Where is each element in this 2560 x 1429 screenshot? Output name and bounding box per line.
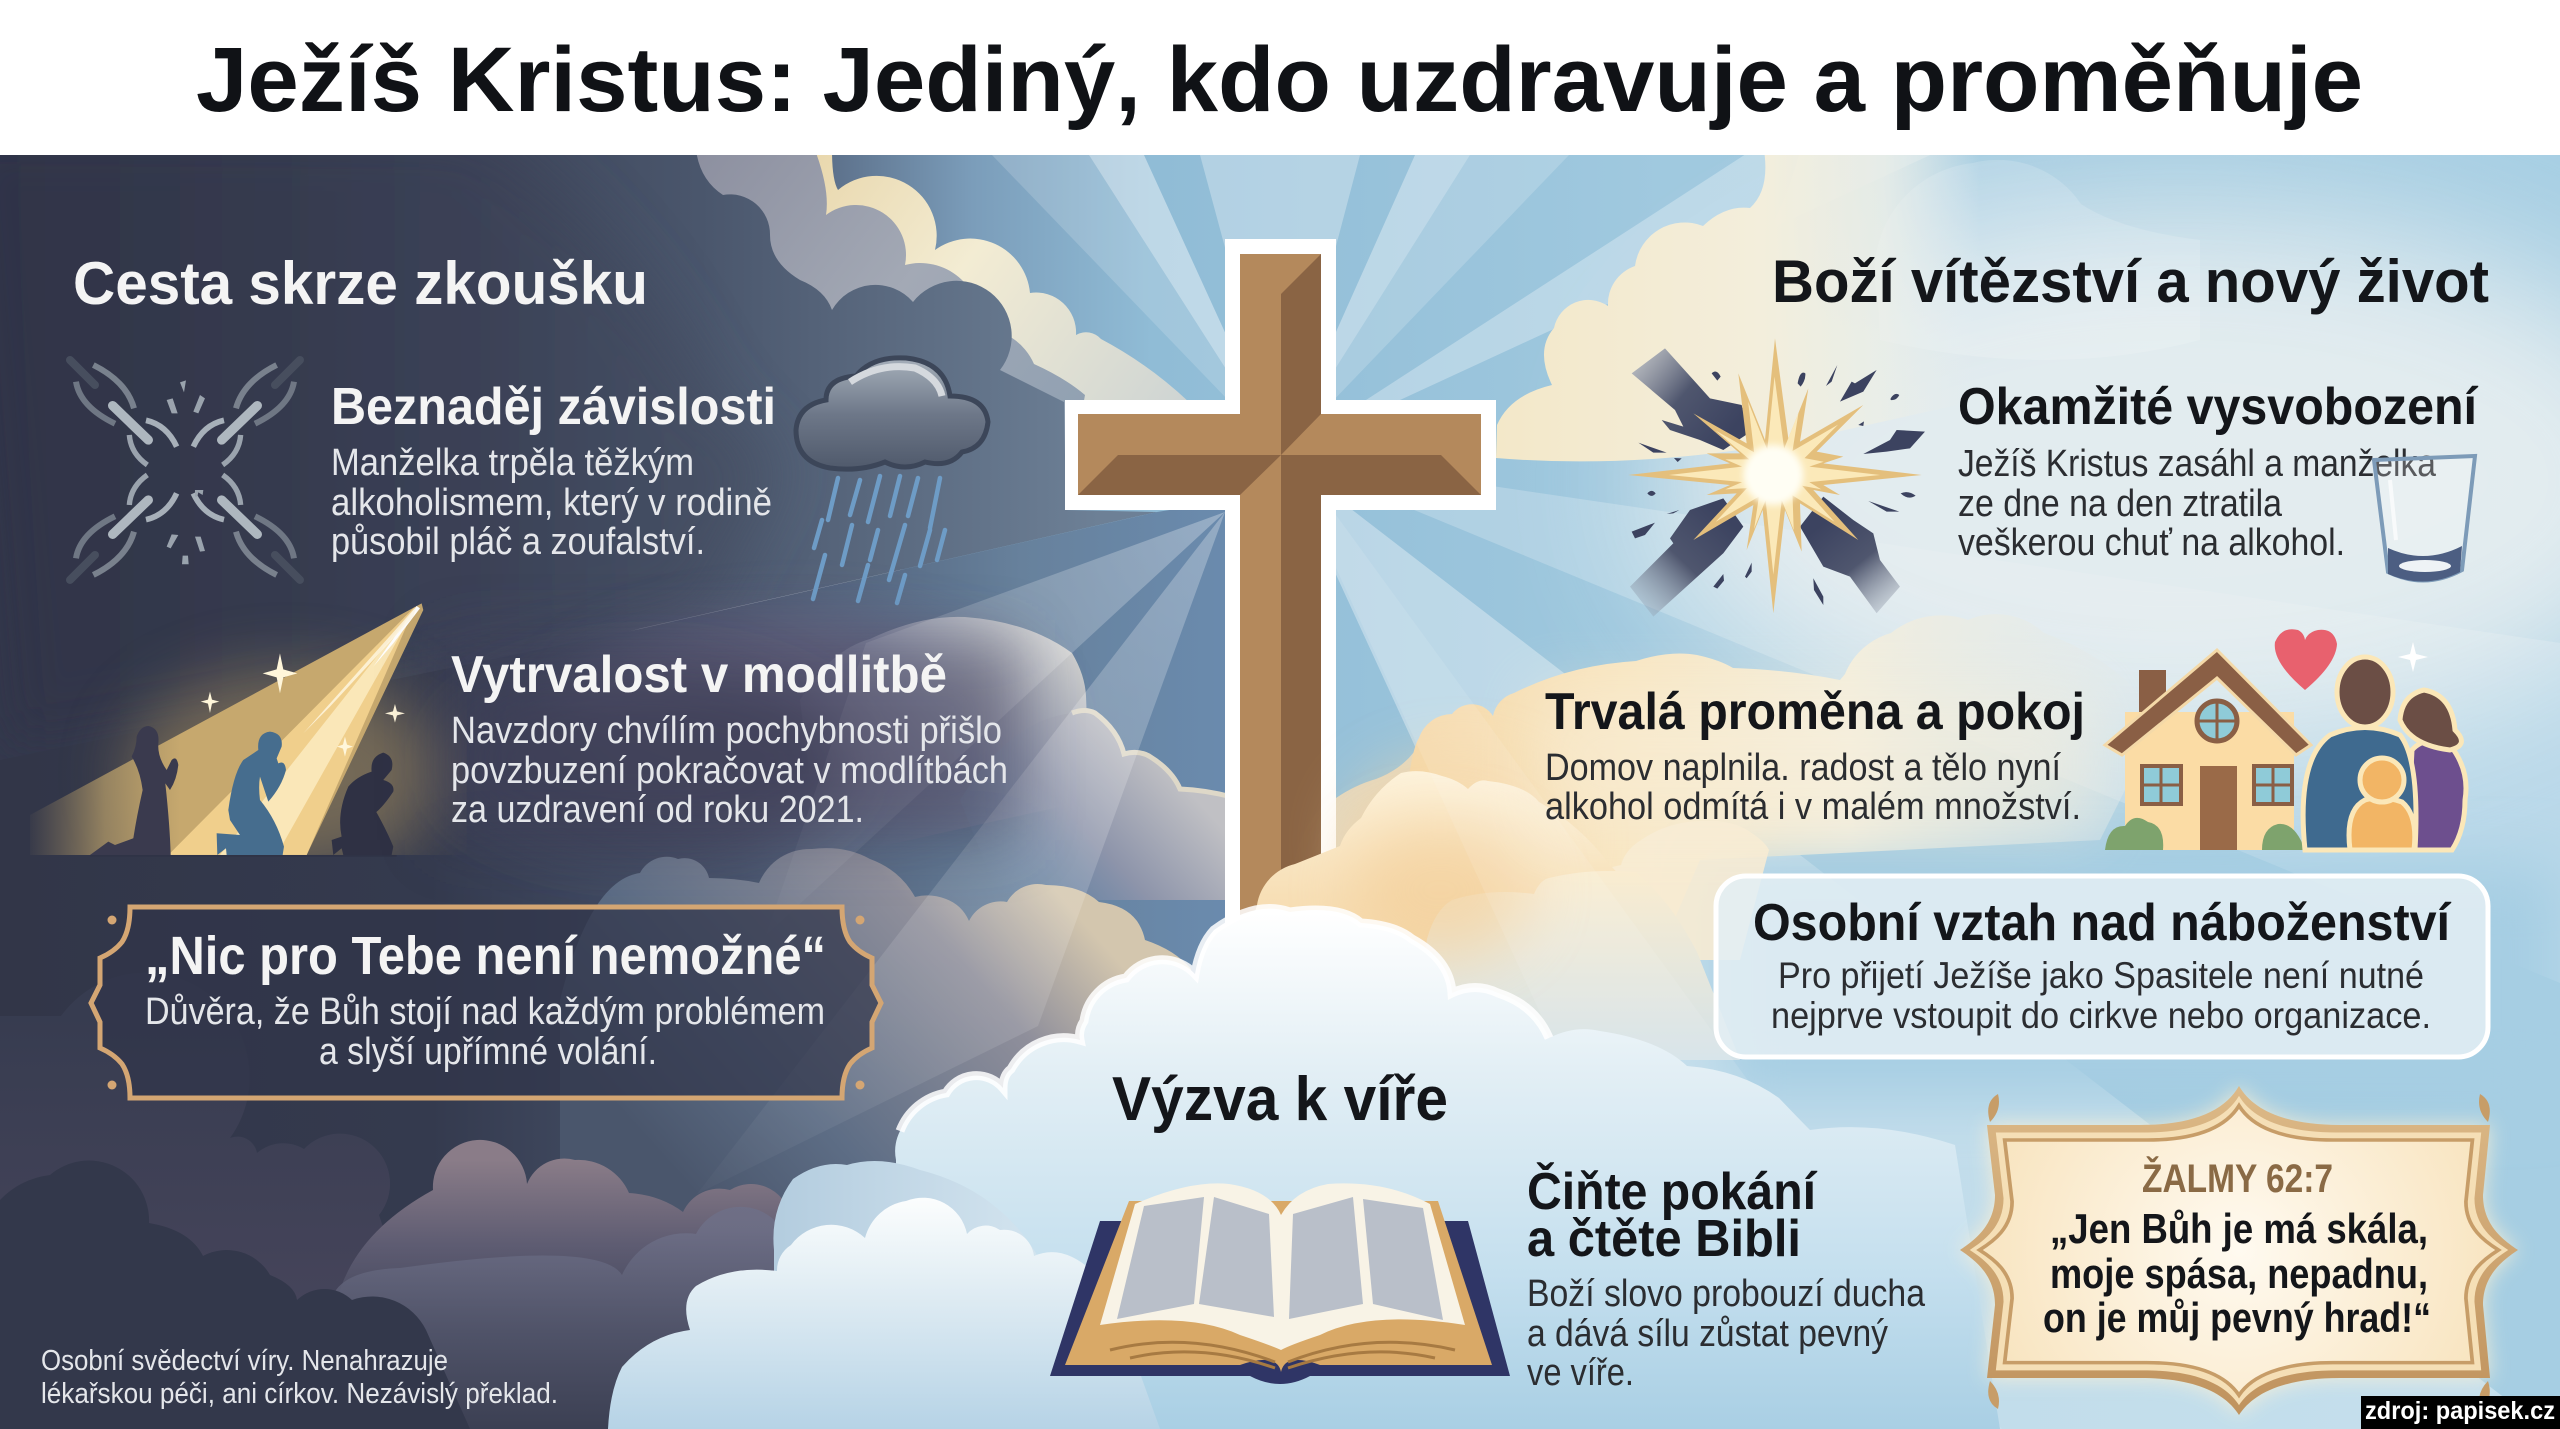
- title: Ježíš Kristus: Jediný, kdo uzdravuje a proměňuje: [196, 29, 2363, 131]
- icon: empty glass: [2374, 456, 2475, 582]
- sparkle: [2398, 642, 2428, 672]
- text block: lasting change: Trvalá proměna a pokoj: [1545, 683, 2085, 741]
- rays across the dark side: [768, 512, 1225, 1135]
- icon: open bible: [1050, 1183, 1510, 1384]
- heart: [2275, 629, 2337, 690]
- callout: personal relationship box: Pro přijetí Ježíše jako Spasitele není nutné: [1778, 955, 2424, 996]
- cross: [1065, 239, 1496, 960]
- text block: repent and read: [1527, 1162, 1926, 1394]
- lavender cloud: [829, 616, 1086, 828]
- grey cloud above the quote: [560, 848, 1191, 1196]
- bright clouds top right: [1496, 150, 2560, 750]
- text block: deliverance: Ježíš Kristus zasáhl a manželka: [1958, 443, 2437, 485]
- callout: quote frame: a slyší upřímné volání.: [319, 1031, 657, 1073]
- disclaimer text: lékařskou péči, ani církov. Nezávislý překlad.: [41, 1378, 558, 1410]
- family: [2303, 657, 2466, 850]
- text block: addiction: [331, 378, 776, 563]
- text block: prayer: Navzdory chvílím pochybnosti přišlo: [451, 710, 1002, 752]
- callout: quote frame: [91, 907, 881, 1098]
- text block: repent and read: Čiňte pokání: [1527, 1162, 1817, 1221]
- figure: bowing man: [332, 753, 394, 855]
- text block: deliverance: veškerou chuť na alkohol.: [1958, 522, 2345, 564]
- icon: broken chains: [70, 360, 300, 580]
- disclaimer text: Osobní svědectví víry. Nenahrazuje: [41, 1345, 448, 1377]
- white clouds centre bottom: [608, 909, 2000, 1429]
- figure: woman: [90, 726, 178, 855]
- callout: psalm plaque: on je můj pevný hrad!“: [2043, 1294, 2431, 1341]
- callout: quote frame: „Nic pro Tebe není nemožné“: [145, 926, 826, 986]
- house: [2105, 650, 2311, 850]
- icon: starburst breaking chains: [1628, 338, 1925, 617]
- callout: personal relationship box: Osobní vztah nad náboženství: [1753, 894, 2451, 952]
- text block: prayer: Vytrvalost v modlitbě: [451, 646, 947, 704]
- text block: deliverance: ze dne na den ztratila: [1958, 483, 2283, 525]
- text block: deliverance: Okamžité vysvobození: [1958, 378, 2478, 436]
- callout: quote frame: Důvěra, že Bůh stojí nad každým problémem: [145, 991, 825, 1033]
- dark clouds bottom left: [0, 1019, 782, 1429]
- text block: deliverance: [1958, 378, 2478, 564]
- disclaimer text: [41, 1345, 558, 1410]
- sky background: [832, 155, 2560, 1429]
- callout: psalm plaque: „Jen Bůh je má skála,: [2050, 1205, 2428, 1252]
- callout: personal relationship box: [1716, 876, 2488, 1057]
- icon: house and family: [2105, 629, 2466, 850]
- text block: repent and read: ve víře.: [1527, 1352, 1634, 1394]
- figure: kneeling man: [217, 732, 286, 855]
- text block: lasting change: alkohol odmítá i v malém množství.: [1545, 786, 2081, 828]
- title bar: [0, 0, 2560, 155]
- text block: prayer: za uzdravení od roku 2021.: [451, 789, 864, 831]
- text block: repent and read: a čtěte Bibli: [1527, 1210, 1801, 1268]
- heading: right column: Boží vítězství a nový život: [1772, 248, 2489, 315]
- text block: addiction: Manželka trpěla těžkým: [331, 442, 694, 484]
- text block: addiction: působil pláč a zoufalství.: [331, 521, 705, 563]
- heading: call to faith: Výzva k víře: [1112, 1065, 1448, 1134]
- text block: prayer: povzbuzení pokračovat v modlítbách: [451, 750, 1008, 792]
- text block: repent and read: a dává sílu zůstat pevný: [1527, 1313, 1888, 1355]
- storm clouds top left: [498, 155, 1186, 631]
- text block: prayer: [440, 640, 1020, 840]
- icon: praying figures in light beam: [30, 603, 447, 873]
- text block: lasting change: Domov naplnila. radost a tělo nyní: [1545, 747, 2061, 789]
- text block: addiction: Beznaděj závislosti: [331, 378, 776, 436]
- callout: psalm plaque: ŽALMY 62:7: [2142, 1155, 2333, 1201]
- callout: personal relationship box: nejprve vstoupit do cirkve nebo organizace.: [1771, 995, 2431, 1036]
- cream clouds lower right: [1230, 515, 2560, 1429]
- text block: lasting change: [1535, 683, 2095, 835]
- icon: rain cloud: [796, 358, 988, 603]
- text block: addiction: alkoholismem, který v rodině: [331, 482, 772, 524]
- callout: psalm plaque: moje spása, nepadnu,: [2050, 1250, 2428, 1297]
- text block: repent and read: Boží slovo probouzí ducha: [1527, 1273, 1926, 1315]
- heading: left column: Cesta skrze zkoušku: [73, 250, 648, 317]
- callout: psalm plaque: [1960, 1086, 2518, 1415]
- lower left storm sky: [0, 510, 1225, 1196]
- grey cloud with cream rim: [1010, 713, 1225, 900]
